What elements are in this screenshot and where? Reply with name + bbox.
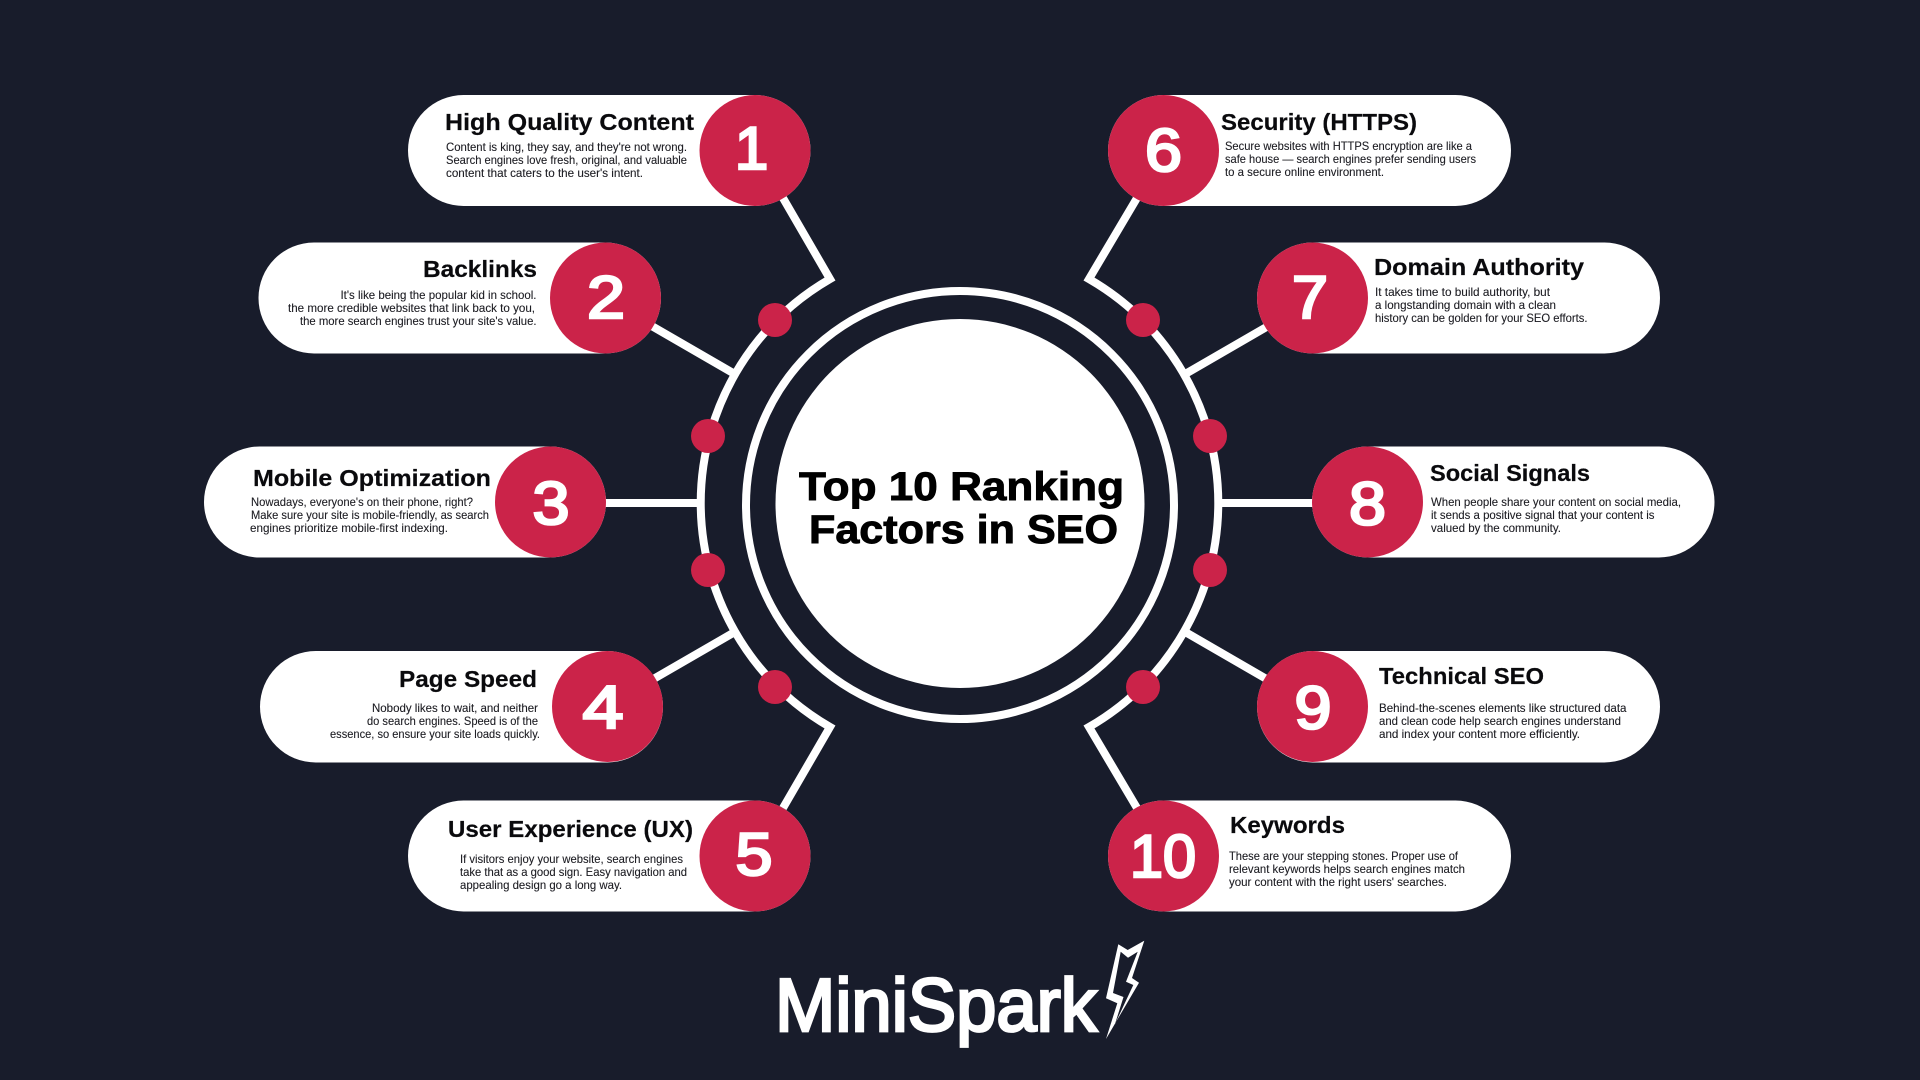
panel: item 2 Backlinks [258,242,661,354]
panel: item 3 Mobile Optimization: Nowadays, everyone's on their phone, right? [251,496,473,509]
panel: item 10 Keywords: relevant keywords helps search engines match [1229,863,1465,876]
panel: item 7 Domain Authority: a longstanding domain with a clean [1375,299,1556,312]
right connector arc with links to items 6 and 10 [1089,198,1218,808]
panel: item 4 Page Speed: Page Speed [399,666,537,692]
logo: MiniSpark: MiniSpark [775,963,1097,1047]
panel: item 5 User Experience: appealing design go a long way. [460,879,622,892]
title [799,465,1124,552]
panel: item 4 Page Speed: do search engines. Speed is of the [367,715,538,728]
connector: item 8 [1218,499,1320,507]
panel: item 1 High Quality Content: High Quality Content [445,109,694,135]
connector: item 7 [1187,325,1270,373]
panel: item 7 Domain Authority: It takes time to build authority, but [1375,286,1551,299]
panel: item 10 Keywords [1108,800,1511,912]
panel: item 8 Social Signals: When people share your content on social media, [1431,496,1681,509]
panel: item 10 Keywords: These are your stepping stones. Proper use of [1229,850,1459,863]
panel: item 8 Social Signals: valued by the community. [1431,522,1561,535]
panel: item 4 Page Speed [260,651,663,762]
panel: item 2 Backlinks: the more credible websites that link back to you, [288,302,535,315]
panel: item 9 Technical SEO: and index your content more efficiently. [1379,728,1580,741]
panel: item 6 Security: safe house — search engines prefer sending users [1225,153,1476,166]
connector: item 4 [650,633,733,681]
panel: item 9 Technical SEO: Behind-the-scenes elements like structured data [1379,702,1627,715]
panel: item 3 Mobile Optimization [204,446,606,558]
panel: item 3 Mobile Optimization: Make sure your site is mobile-friendly, as search [251,509,489,522]
panel: item 1 High Quality Content: Content is king, they say, and they're not wrong. [446,141,687,154]
connector: item 2 [650,325,733,373]
panel: item 8 Social Signals: it sends a positive signal that your content is [1431,509,1655,522]
panel: item 5 User Experience: User Experience (UX) [448,816,693,842]
red connector dots [691,303,1227,704]
panel: item 8 Social Signals [1312,446,1714,558]
panel: item 8 Social Signals: 8 [1349,470,1386,538]
panel: item 7 Domain Authority: Domain Authority [1374,254,1584,280]
panel: item 3 Mobile Optimization: Mobile Optimization [253,465,491,491]
panel: item 4 Page Speed: Nobody likes to wait, and neither [372,702,538,715]
panel: item 10 Keywords: your content with the right users' searches. [1229,876,1447,889]
title: Top 10 Ranking [799,465,1124,509]
panel: item 4 Page Speed: 4 [582,674,624,741]
connector: item 9 [1187,633,1270,681]
panel: item 5 User Experience: If visitors enjoy your website, search engines [460,853,683,866]
panel: item 7 Domain Authority [1257,242,1660,354]
panel: item 3 Mobile Optimization: engines prioritize mobile-first indexing. [250,522,448,535]
panel: item 10 Keywords: Keywords [1230,812,1345,838]
panel: item 9 Technical SEO: 9 [1294,674,1332,742]
panel: item 9 Technical SEO: Technical SEO [1379,663,1544,689]
panel: item 5 User Experience: take that as a good sign. Easy navigation and [460,866,687,879]
panel: item 3 Mobile Optimization: 3 [532,470,570,537]
panel: item 1 High Quality Content: content that caters to the user's intent. [446,167,643,180]
panel: item 7 Domain Authority: 7 [1292,264,1328,331]
panel: item 7 Domain Authority: history can be golden for your SEO efforts. [1375,312,1588,325]
panel: item 6 Security: Security (HTTPS) [1221,109,1417,135]
panel: item 9 Technical SEO: and clean code help search engines understand [1379,715,1621,728]
panel: item 5 User Experience [408,800,810,912]
panel: item 10 Keywords: 10 [1130,823,1196,890]
panel: item 2 Backlinks: Backlinks [423,256,537,282]
panel: item 2 Backlinks: It's like being the popular kid in school. [340,289,536,302]
panel: item 1 High Quality Content [408,95,810,206]
panel: item 8 Social Signals: Social Signals [1430,460,1590,486]
panel: item 6 Security [1108,95,1511,206]
connector: item 3 [600,499,702,507]
panel: item 5 User Experience: 5 [736,821,772,888]
panel: item 6 Security: 6 [1145,117,1182,184]
panel: item 4 Page Speed: essence, so ensure your site loads quickly. [330,728,540,741]
panel: item 2 Backlinks: 2 [587,264,625,331]
title: Factors in SEO [809,508,1118,552]
panel: item 2 Backlinks: the more search engines trust your site's value. [300,315,536,328]
panel: item 6 Security: to a secure online environment. [1225,166,1384,179]
centre ring [746,291,1174,719]
panel: item 1 High Quality Content: Search engines love fresh, original, and valuable [446,154,687,167]
panel: item 6 Security: Secure websites with HTTPS encryption are like a [1225,140,1472,153]
left connector arc with links to items 1 and 5 [701,198,830,808]
panel: item 1 High Quality Content: 1 [735,115,768,182]
centre disc [776,319,1144,688]
panel: item 9 Technical SEO [1257,651,1660,762]
